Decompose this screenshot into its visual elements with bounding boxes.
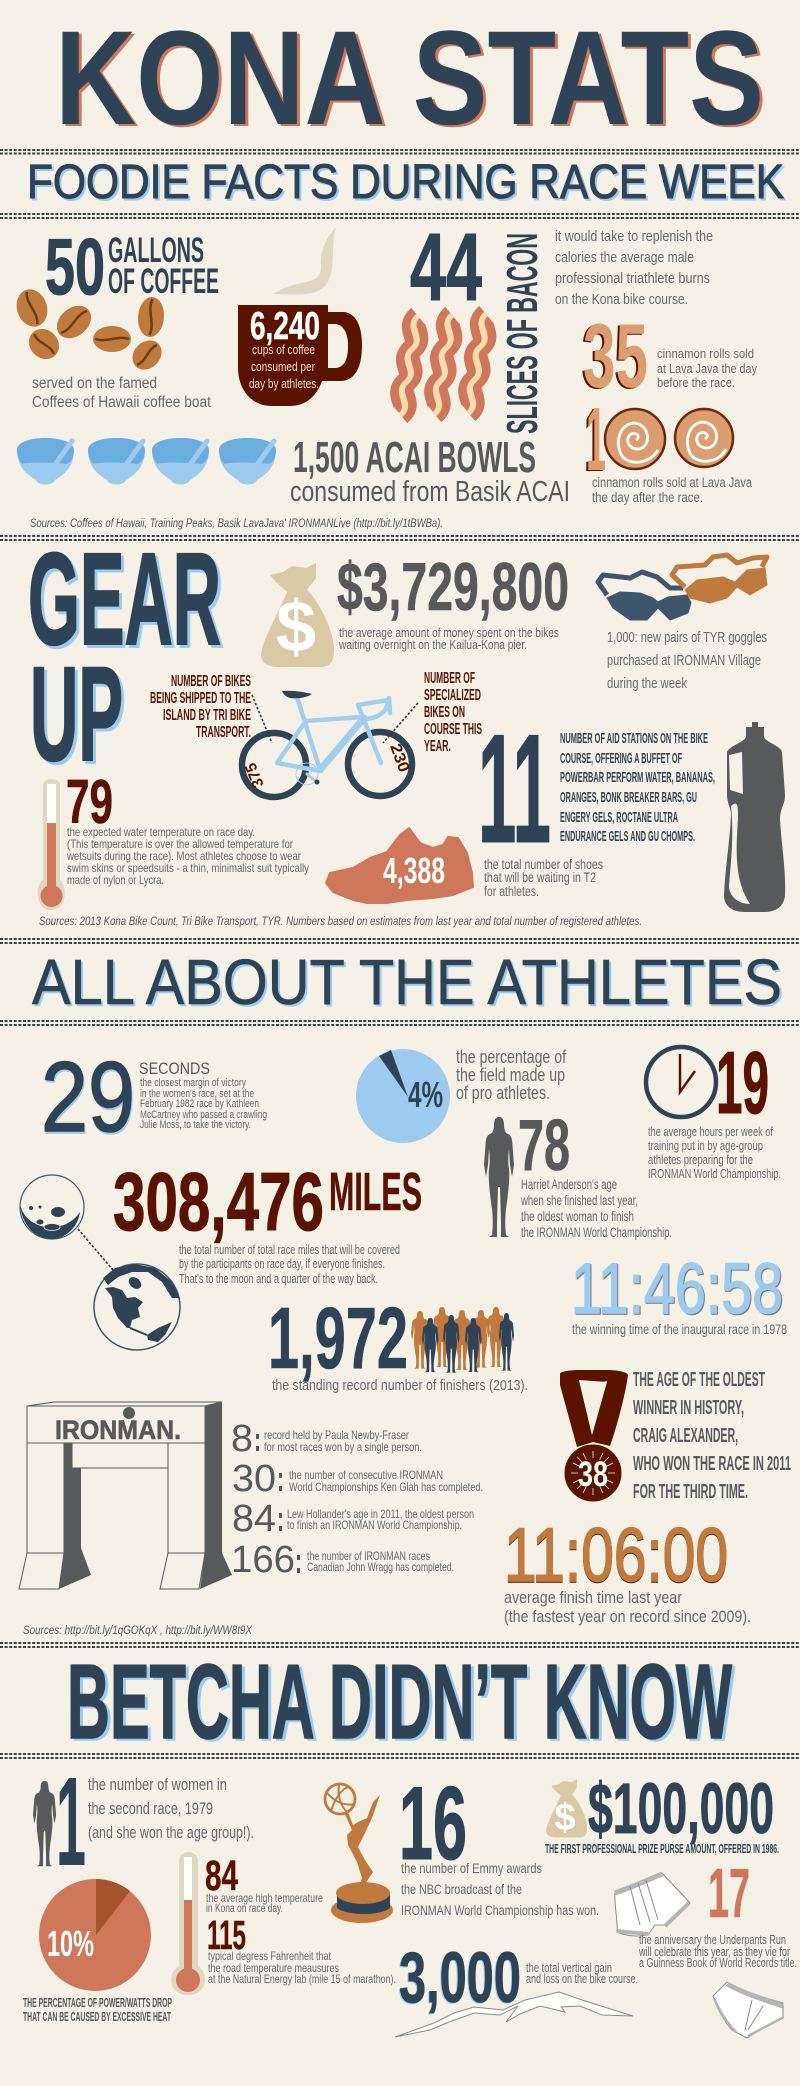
text: shoes [484,857,603,899]
text: goggles [607,630,767,692]
list: ironman records: World Championships Ken Glah has completed. [289,1480,483,1494]
stat: 29 seconds: McCartney who passed a crawling [140,1109,267,1121]
icon: mountain [395,1992,633,2037]
text: goggles: during the week [607,676,688,692]
text: replenish calories: it would take to replenish the [555,229,713,245]
panel: athletes [19,1033,791,1637]
icon: briefs [713,1982,783,2038]
icon: woman silhouette [484,1117,514,1237]
text: pro athletes: of pro athletes. [456,1083,550,1103]
stat: 79 water temperature: wetsuits during the race). Most athletes choose to wear [66,849,301,863]
text: power drop [23,1995,172,2024]
text: shoes: for athletes. [484,884,539,899]
stat: 16 emmys: 16 [399,1766,467,1882]
text: replenish calories: on the Kona bike course. [555,292,688,308]
stat: 11 aid stations [478,702,715,875]
panel: gear up [28,525,785,928]
stat: 1 woman: (and she won the age group!). [88,1824,254,1842]
callout: specialized bikes [424,670,482,755]
text: pro athletes: the field made up [456,1065,565,1085]
stat: 29 seconds: 29 [41,1041,135,1152]
icon: medal 38 [560,1370,628,1502]
list: ironman records [231,1418,483,1581]
chart: 10% pie: 10% [47,1923,94,1964]
stat: 84 and 115 temperatures: in Kona on race day. [206,1901,283,1915]
icon: clock [646,1047,716,1117]
icon: ironman finish arch: IRONMAN. [55,1415,181,1445]
stat: 79 water temperature: (This temperature is over the allowed temperature for [67,837,293,851]
stat: bike money: the average amount of money spent on the bikes [339,625,559,640]
icon: thermometer [171,1852,205,1995]
icon: boxer briefs [615,1873,690,1936]
stat: 308,476 miles [113,1155,422,1286]
stat: 29 seconds [41,1041,267,1152]
text: replenish calories: calories the average male [555,250,694,266]
stat: 78: the IRONMAN World Championship. [521,1225,672,1240]
stat: bike money: waiting overnight on the Kailua-Kona pier. [338,637,527,652]
stat: 84 and 115 temperatures: 115 [207,1912,246,1958]
stat: 1,500 acai bowls: consumed from Basik ACAI [290,476,570,508]
list: ironman records: the number of consecutive IRONMAN [289,1468,443,1482]
stat: 17 underpants run [638,1854,797,1970]
stat: 84 and 115 temperatures: typical degress Fahrenheit that [208,1949,331,1963]
callout: bikes shipped [150,673,251,741]
stat: 16 emmys: the NBC broadcast of the [401,1881,522,1897]
stat: 308,476 miles: the total number of total race miles that will be covered [179,1242,400,1257]
icon: moon [20,1175,84,1239]
list: ironman records: Canadian John Wragg has completed. [307,1560,454,1574]
stat: 308,476 miles: That's to the moon and a quarter of the way back. [179,1271,378,1286]
stat: 3,000 vertical gain: and loss on the bike course. [526,1972,638,1986]
stat: 78: the oldest woman to finish [521,1209,634,1224]
list: ironman records: Lew Hollander's age in 2011, the oldest person [287,1507,474,1521]
text: served on the famed: served on the famed [32,375,157,392]
text: served on the famed [32,375,212,411]
chart: 4% pie: 4% [408,1074,443,1115]
stat: 11:06:00: 11:06:00 [504,1513,728,1598]
stat: 35 cinnamon rolls: cinnamon rolls sold [657,346,754,361]
icon: bacon [397,314,489,415]
text: shoes: the total number of shoes [484,857,603,872]
stat: 1,972 finishers: the standing record number of finishers (2013). [272,1377,528,1394]
icon: steam [273,227,336,294]
stat: 3,000 vertical gain: the total vertical gain [526,1961,612,1975]
stat: 308,476 miles: by the participants on race day, if everyone finishes. [179,1256,385,1271]
list: ironman records: 84 [232,1498,276,1540]
text: served on the famed: Coffees of Hawaii coffee boat [32,394,212,411]
chart: 10% pie [39,1879,151,1991]
stat: 11 aid stations: ENGERY GELS, ROCTANE ULTRA [560,809,678,826]
stat: 50 gallons of coffee [45,222,219,311]
stat: 3,000 vertical gain: 3,000 [399,1939,521,2018]
stat: 100 cinnamon rolls: 1 [586,390,606,490]
icon: goggles [598,555,767,620]
stat: 29 seconds: in the women's race, set at the [140,1088,254,1100]
stat: bike money [337,549,569,652]
list: ironman records: 166 [231,1539,295,1581]
text: power drop: THAT CAN BE CAUSED BY EXCESSIVE HEAT [23,2009,171,2024]
list: ironman records: 8 [231,1418,253,1460]
icon: ironman finish arch [19,1402,232,1589]
icon: thermometer 79 [38,779,65,910]
stat: 29 seconds: February 1982 race by Kathleen [140,1098,259,1110]
dotted link: moon to earth [78,1229,113,1270]
stat: 79 water temperature: made of nylon or Lycra. [67,873,164,887]
icon: emmy statue [325,1784,393,1923]
stat: 29 seconds: Julie Moss, to take the victory. [140,1119,251,1131]
heading: gear up [28,525,221,789]
stat: 84 and 115 temperatures: the average high temperature [206,1891,323,1905]
icon: medal 38: 38 [578,1455,608,1494]
stat: 78: 78 [518,1106,570,1186]
stat: 79 water temperature: the expected water temperature on race day. [67,825,255,839]
stat: 35 cinnamon rolls [583,306,757,407]
callout: specialized bikes: YEAR. [424,738,451,755]
stat: 11:06:00: (the fastest year on record since 2009). [504,1607,751,1626]
icon: running shoe with 4,388 [326,828,473,903]
stat: 29 seconds: the closest margin of victory [140,1077,246,1089]
text: oldest winner [633,1369,791,1503]
stat: 44: 44 [410,214,482,321]
callout: specialized bikes: COURSE THIS [424,721,482,738]
stat: 1 woman: 1 [56,1751,86,1892]
icon: coffee mug with 6,240: 6,240 [250,305,320,348]
text: shoes: that will be waiting in T2 [484,870,596,885]
heading: gear up: UP [30,640,123,789]
icon: coffee mug with 6,240: consumed per [251,360,315,374]
text: replenish calories: professional triathlete burns [555,271,710,287]
icon: small money bag [546,1779,587,1839]
stat: 16 emmys: IRONMAN World Championship has won. [401,1902,599,1918]
stat: 50 gallons of coffee: 50 [45,222,105,311]
panel: betcha didn't know [23,1751,797,2038]
sources: Sources: Coffees of Hawaii, Training Peaks, Basik LavaJava' IRONMANLive (http://bit.ly/1tBWBa). [30,518,443,530]
callout: specialized bikes: BIKES ON [424,704,465,721]
sources: Sources: 2013 Kona Bike Count, Tri Bike Transport, TYR. Numbers based on estimates from last year and total number of registered athletes. [39,916,642,928]
list: ironman records: record held by Paula Newby-Fraser [264,1428,409,1442]
callout: bikes shipped: BEING SHIPPED TO THE [150,690,251,707]
icon: bicycle: 230 [386,742,412,775]
stat: 11:06:00: average finish time last year [504,1588,682,1607]
stat: 35 cinnamon rolls: 35 [583,306,648,407]
panel: foodie facts [12,214,757,530]
text: pro athletes [456,1047,567,1103]
list: ironman records: to finish an IRONMAN World Championship. [287,1518,462,1532]
stat: 1 woman: the second race, 1979 [88,1800,213,1818]
text: replenish calories [555,229,713,308]
callout: bikes shipped: TRANSPORT. [196,724,251,741]
stat: 79 water temperature: swim skins or speedsuits - a thin, minimalist suit typically [67,861,309,875]
list: ironman records: 30 [232,1458,276,1500]
callout: bikes shipped: NUMBER OF BIKES [171,673,251,690]
stat: 17 underpants run: 17 [708,1854,750,1932]
callout: bikes shipped: ISLAND BY TRI BIKE [163,707,251,724]
stat: 1,500 acai bowls [290,433,570,508]
callout: specialized bikes: SPECIALIZED [424,687,481,704]
icon: money bag [261,563,334,667]
stat: 1,500 acai bowls: 1,500 ACAI BOWLS [293,433,536,482]
sources: Sources: http://bit.ly/1qGOKqX , http://bit.ly/WW8t9X [23,1625,253,1637]
icon: coffee mug with 6,240 [238,305,362,406]
stat: 100 cinnamon rolls [586,390,752,505]
icon: crowd of finishers [411,1307,514,1373]
icon: small money bag: $ [554,1797,576,1839]
icon: coffee mug with 6,240: cups of coffee [252,343,315,357]
icon: money bag: $ [276,587,316,667]
stat: 79 water temperature: 79 [66,768,113,837]
icon: coffee beans [12,285,168,376]
chart: 4% pie [356,1049,450,1143]
list: ironman records: for most races won by a single person. [264,1440,422,1454]
panel: foodie facts: SLICES OF BACON [498,233,547,434]
list: ironman records: the number of IRONMAN races [307,1549,430,1563]
stat: 35 cinnamon rolls: at Lava Java the day [657,361,757,376]
text: pro athletes: the percentage of [456,1047,567,1067]
stat: 19 hours [648,1033,781,1181]
callout: specialized bikes: NUMBER OF [424,670,475,687]
stat: 35 cinnamon rolls: before the race. [657,375,735,390]
icon: water bottle [724,722,785,912]
icon: bicycle: 375 [243,760,268,790]
stat: 1,972 finishers: 1,972 [268,1290,408,1387]
stat: $100,000 [545,1770,779,1856]
stat: 29 seconds: SECONDS [139,1059,210,1078]
stat: 308,476 miles: MILES [329,1162,422,1222]
stat: 1 woman [56,1751,254,1892]
stat: 84 and 115 temperatures [205,1852,396,1986]
stat: 19 hours: athletes preparing for the [648,1152,753,1167]
stat: 16 emmys [399,1766,599,1918]
icon: coffee mug with 6,240: day by athletes. [249,377,319,391]
stat: 50 gallons of coffee: GALLONS [108,231,204,270]
stat: 308,476 miles: 308,476 [113,1155,324,1248]
stat: 84 and 115 temperatures: the road temperature meausures [208,1961,339,1975]
icon: running shoe with 4,388: 4,388 [383,850,445,891]
stat: 100 cinnamon rolls: cinnamon rolls sold at Lava Java [592,475,752,490]
stat: bike money: $3,729,800 [337,549,569,625]
stat: 16 emmys: the number of Emmy awards [401,1860,542,1876]
text: power drop: THE PERCENTAGE OF POWER/WATTS DROP [23,1995,172,2010]
icon: bicycle [242,691,418,797]
icon: acai bowls [17,438,276,484]
stat: 78: when she finished last year, [520,1193,638,1208]
stat: 78: Harriet Anderson's age [521,1177,617,1192]
icon: earth [94,1264,180,1350]
stat: 84 and 115 temperatures: at the Natural Energy lab (mile 15 of marathon). [208,1972,396,1986]
stat: 11 aid stations: 11 [478,702,551,875]
heading: gear up: GEAR [28,525,221,672]
stat: 100 cinnamon rolls: the day after the race. [592,490,703,505]
stat: 78 [518,1106,672,1240]
stat: 11:06:00 [504,1513,751,1626]
icon: woman silhouette [33,1781,56,1866]
stat: 1 woman: the number of women in [88,1776,227,1794]
stat: 84 and 115 temperatures: 84 [205,1852,238,1900]
stat: 50 gallons of coffee: OF COFFEE [108,262,219,301]
stat: 79 water temperature [66,768,309,887]
